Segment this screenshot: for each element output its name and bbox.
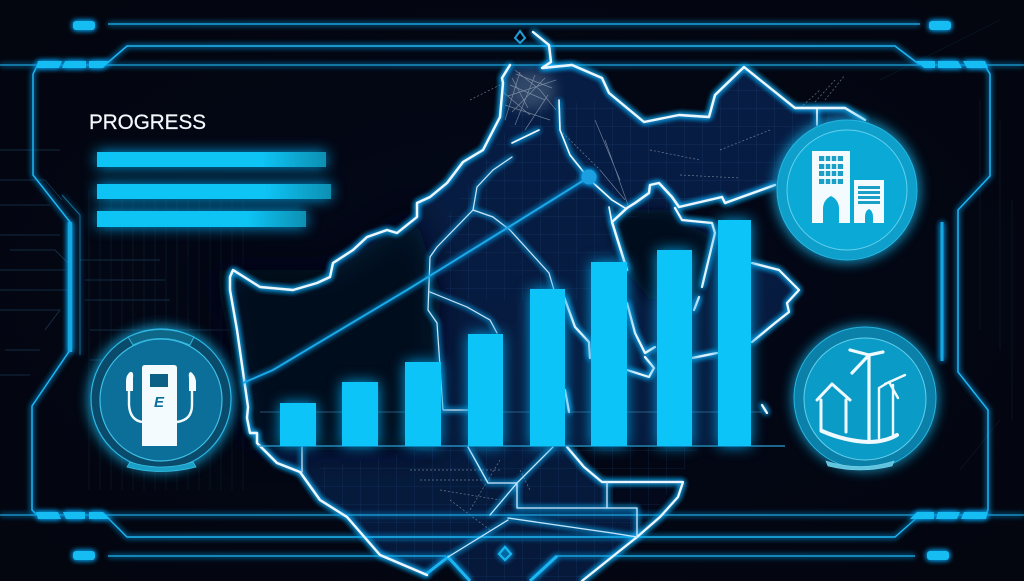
- coast: west: [230, 65, 510, 575]
- circuit background: left: [0, 20, 1012, 490]
- coast: inland river: [512, 100, 817, 223]
- icon: house and wind turbines: [792, 325, 938, 471]
- trend line: [243, 170, 596, 383]
- icon: EV charger: E: [154, 394, 165, 411]
- bar chart: [280, 220, 751, 446]
- coast: south peninsula: [612, 183, 775, 270]
- coast: gulf branches: [564, 208, 799, 413]
- icon: buildings: [774, 117, 920, 263]
- icon: bottom diamond: [499, 547, 511, 560]
- borders: inland: [302, 157, 554, 472]
- map: western landmass: [230, 65, 865, 581]
- map landmass: [215, 65, 865, 581]
- map: dark sea overlays: [215, 210, 712, 537]
- trend line end dot: [582, 170, 596, 184]
- progress bars: [97, 152, 331, 227]
- icon: top diamond: [515, 31, 525, 43]
- icon: EV charger: [88, 326, 234, 472]
- borders: southern boxes: [448, 447, 637, 557]
- coast: north: [533, 32, 865, 122]
- coast: southern tip: [567, 447, 683, 581]
- map outlines: [230, 32, 865, 581]
- heading: progress: PROGRESS: [89, 110, 206, 134]
- map: dense terrain texture: [410, 70, 845, 530]
- map: bright terrain haze: [504, 70, 556, 110]
- chart axis lines: [257, 412, 785, 446]
- map: grid texture: [300, 67, 840, 581]
